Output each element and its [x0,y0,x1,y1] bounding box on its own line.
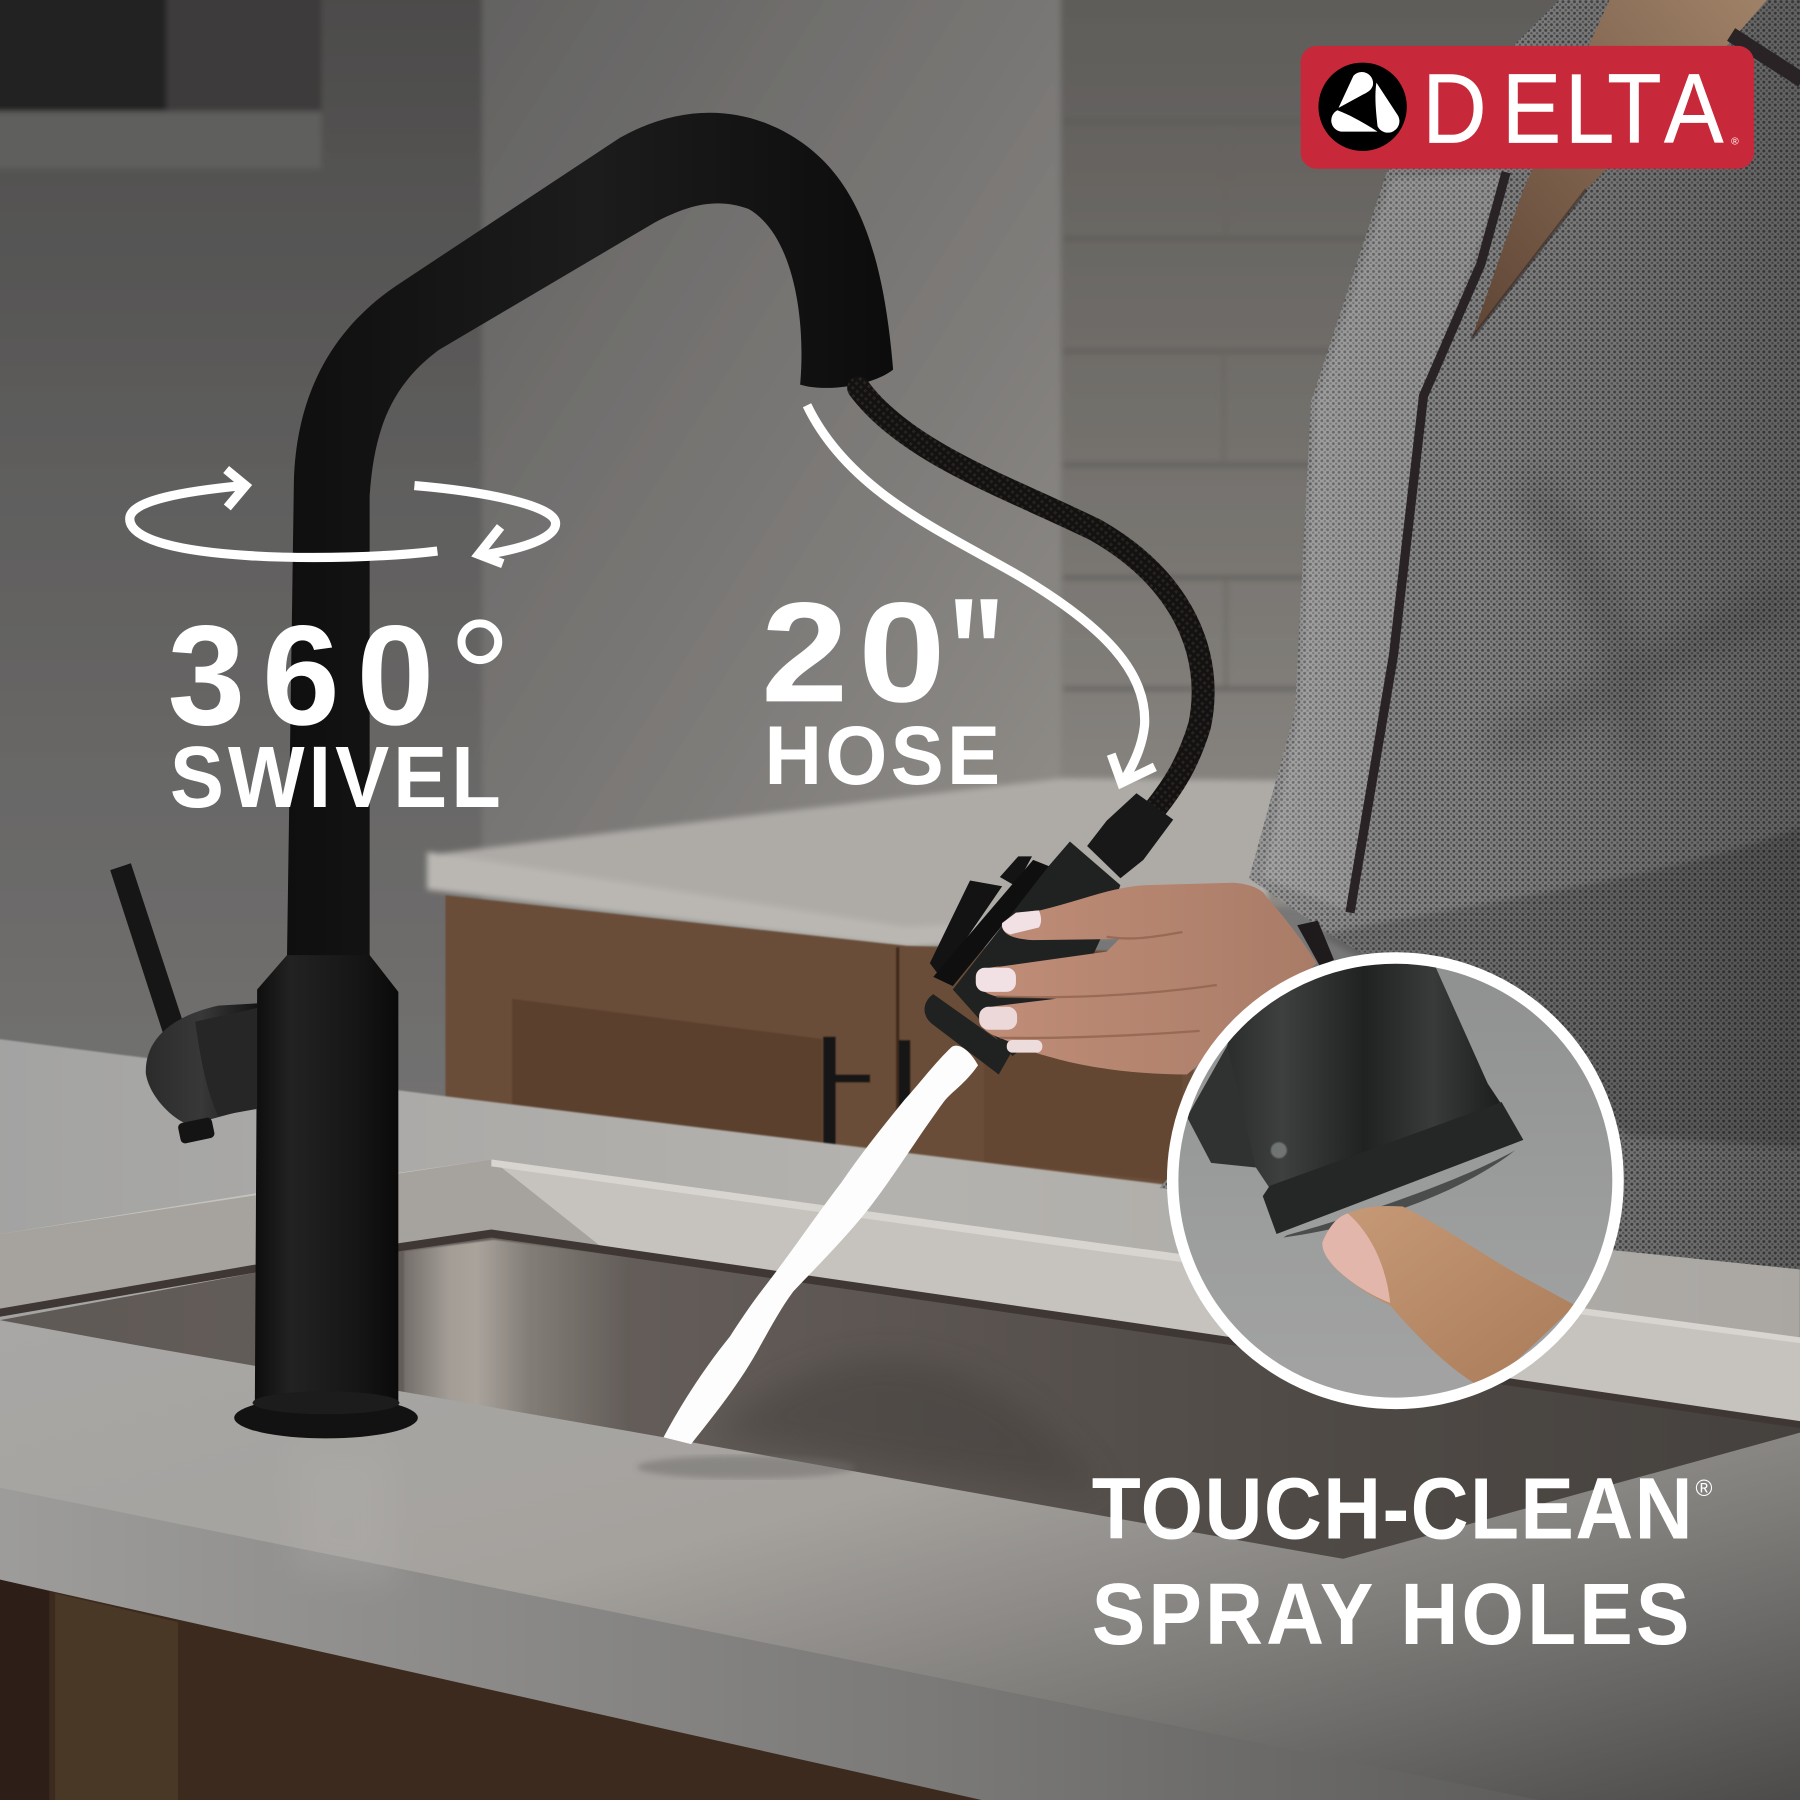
touch-clean spray holes label: TOUCH-CLEAN [1092,1459,1693,1557]
shirt cuff [1297,921,1334,967]
hose length arrow [807,405,1155,783]
main countertop behind the sink [0,1038,1800,1378]
faucet body and base [234,955,418,1438]
logo emblem [1318,63,1407,151]
wood base cabinet [0,1580,982,1800]
Delta logo badge [1301,46,1754,169]
water stream [664,1046,978,1444]
spray head [924,793,1173,1074]
touch-clean spray holes label: ® [1696,1475,1713,1501]
touch-clean detail inset circle [1171,953,1619,1405]
360 degree swivel label: SWIVEL [170,728,501,826]
sink lip [0,1159,1800,1428]
360 degree swivel label: 360 [168,595,434,755]
Delta logo badge: DELTA [1422,53,1724,163]
hand holding spray head [976,883,1317,1074]
inset: spray head closeup [1187,953,1523,1238]
background: wood cabinet [445,895,1194,1194]
faucet spout and neck [287,113,893,957]
faucet handle [110,863,257,1144]
touch-clean spray holes label: SPRAY HOLES [1092,1565,1689,1663]
inset: fingertip [1322,1206,1575,1395]
woman's shirt [1159,0,1800,1270]
woman's neck [1472,0,1769,339]
shirt placket and collar [1350,34,1800,913]
swivel rotation arrows [130,470,556,564]
touch-clean spray holes label [1092,1459,1713,1663]
360 degree swivel label [168,595,501,826]
Delta logo badge: ® [1731,137,1739,148]
background: kitchen walls and shelf [0,0,1635,1136]
20 inch hose label: HOSE [765,709,1000,803]
background: rear counter [427,778,1291,948]
20 inch hose label [761,573,1000,803]
foreground countertop [0,1321,1800,1800]
20 inch hose label: 20 [761,573,945,732]
braided hose [859,388,1203,809]
sink basin [0,1228,1800,1559]
